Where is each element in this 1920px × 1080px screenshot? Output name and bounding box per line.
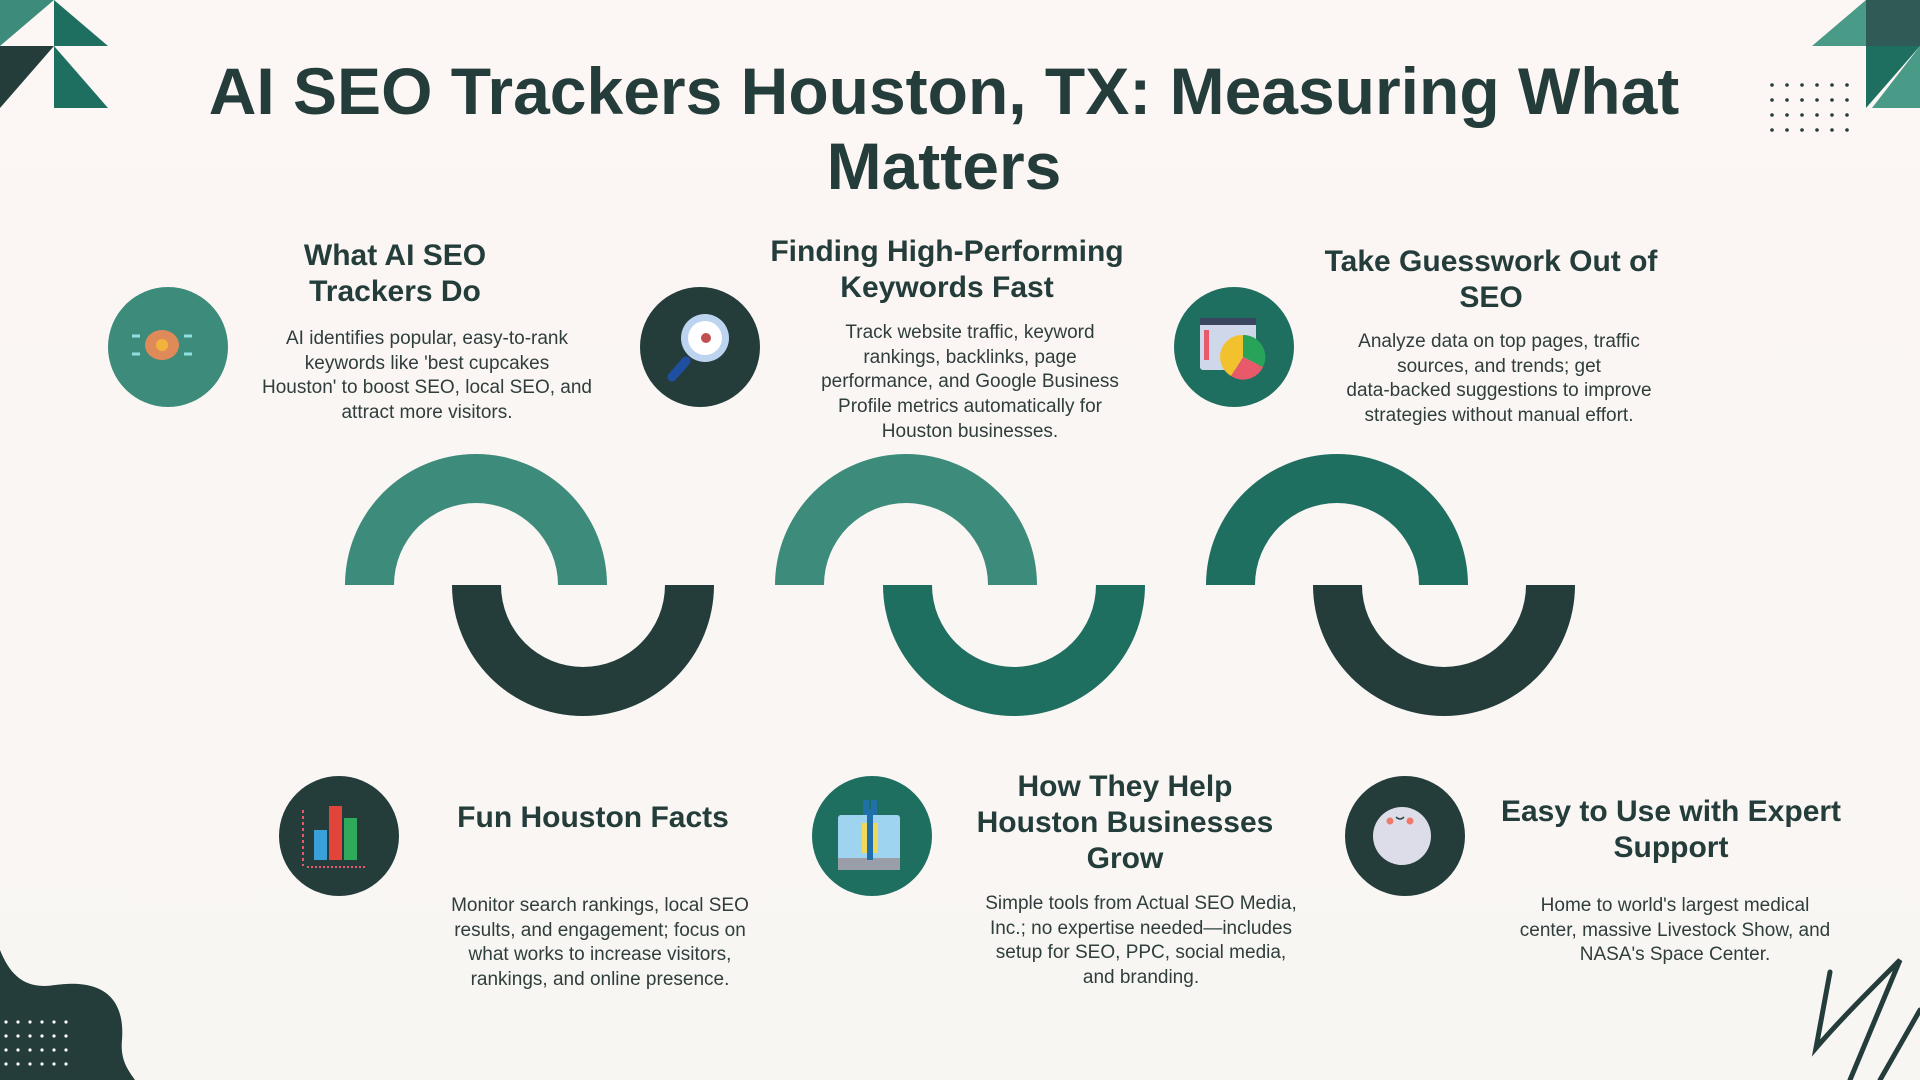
decoration: top-right dot grid <box>1770 83 1849 132</box>
text: guesswork: sources, and trends; get <box>1397 356 1601 377</box>
text: fun facts: results, and engagement; focus on <box>454 920 746 941</box>
decoration: bottom-left blob <box>0 950 135 1080</box>
text: what trackers do <box>262 328 592 423</box>
text: what trackers do: Houston' to boost SEO, local SEO, and <box>262 377 592 398</box>
text: easy to use: NASA's Space Center. <box>1580 944 1770 965</box>
heading: Easy to Use with Expert Support <box>1501 795 1841 864</box>
heading: Easy to Use with Expert Support: Easy to Use with Expert <box>1501 795 1841 828</box>
heading: How They Help Houston Businesses Grow: How They Help <box>1017 770 1233 803</box>
arc 3 top <box>1206 454 1468 585</box>
text: help businesses: and branding. <box>1083 967 1199 988</box>
text: help businesses <box>985 893 1297 988</box>
text: help businesses: Simple tools from Actual SEO Media, <box>985 893 1297 914</box>
text: keywords fast: Track website traffic, keyword <box>845 322 1095 343</box>
title: Matters <box>827 129 1061 203</box>
heading: Finding High-Performing Keywords Fast: Finding High-Performing <box>770 235 1124 268</box>
arc 1 bottom <box>452 585 714 716</box>
decoration: bottom-right squiggle <box>1816 960 1920 1080</box>
icon: report with pie chart <box>1174 287 1294 407</box>
heading: Take Guesswork Out of SEO: Take Guesswork Out of <box>1325 245 1657 278</box>
text: fun facts: rankings, and online presence. <box>471 969 729 990</box>
heading: Take Guesswork Out of SEO <box>1324 245 1658 314</box>
text: easy to use <box>1520 895 1830 965</box>
text: guesswork: data-backed suggestions to improve <box>1346 380 1652 401</box>
decoration: top-right triangles <box>1812 0 1920 108</box>
text: easy to use: center, massive Livestock Show, and <box>1520 920 1830 941</box>
text: fun facts: what works to increase visitors, <box>469 944 731 965</box>
text: fun facts <box>451 895 749 990</box>
arc 2 bottom <box>883 585 1145 716</box>
icon: magnifier <box>640 287 760 407</box>
heading: What AI SEO Trackers Do: Trackers Do <box>309 275 481 308</box>
text: keywords fast <box>821 322 1119 442</box>
title: AI SEO Trackers Houston, TX: Measuring What <box>209 54 1679 128</box>
icon: cute moon <box>1345 776 1465 896</box>
text: what trackers do: attract more visitors. <box>341 402 513 423</box>
heading: Take Guesswork Out of SEO: SEO <box>1459 281 1523 314</box>
text: guesswork: Analyze data on top pages, traffic <box>1358 331 1640 352</box>
heading: Fun Houston Facts: Fun Houston Facts <box>457 801 729 834</box>
heading: How They Help Houston Businesses Grow: Houston Businesses <box>977 806 1273 839</box>
title <box>209 54 1679 203</box>
heading: What AI SEO Trackers Do <box>304 239 486 308</box>
heading: What AI SEO Trackers Do: What AI SEO <box>304 239 486 272</box>
heading: Finding High-Performing Keywords Fast: Keywords Fast <box>840 271 1054 304</box>
text: help businesses: Inc.; no expertise needed—includes <box>990 918 1292 939</box>
heading: How They Help Houston Businesses Grow: Grow <box>1087 842 1163 875</box>
arc 3 bottom <box>1313 585 1575 716</box>
arc 1 top <box>345 454 607 585</box>
heading: How They Help Houston Businesses Grow <box>977 770 1273 875</box>
text: keywords fast: rankings, backlinks, page <box>863 347 1077 368</box>
arc 2 top <box>775 454 1037 585</box>
text: keywords fast: Houston businesses. <box>882 421 1058 442</box>
text: fun facts: Monitor search rankings, local SEO <box>451 895 749 916</box>
heading: Finding High-Performing Keywords Fast <box>770 235 1124 304</box>
icon: bar chart <box>279 776 399 896</box>
icon: brain <box>108 287 228 407</box>
text: what trackers do: AI identifies popular, easy-to-rank <box>286 328 568 349</box>
text: guesswork: strategies without manual effort. <box>1365 405 1633 426</box>
text: help businesses: setup for SEO, PPC, social media, <box>996 942 1286 963</box>
icon: tools tablet <box>812 776 932 896</box>
decoration: bottom-left dots <box>4 1020 68 1066</box>
text: guesswork <box>1346 331 1652 426</box>
heading: Easy to Use with Expert Support: Support <box>1614 831 1728 864</box>
text: easy to use: Home to world's largest medical <box>1541 895 1809 916</box>
text: keywords fast: performance, and Google Business <box>821 371 1119 392</box>
text: keywords fast: Profile metrics automatically for <box>838 396 1102 417</box>
text: what trackers do: keywords like 'best cupcakes <box>305 353 549 374</box>
decoration: top-left triangles <box>0 0 108 108</box>
chain arcs <box>345 454 1575 716</box>
